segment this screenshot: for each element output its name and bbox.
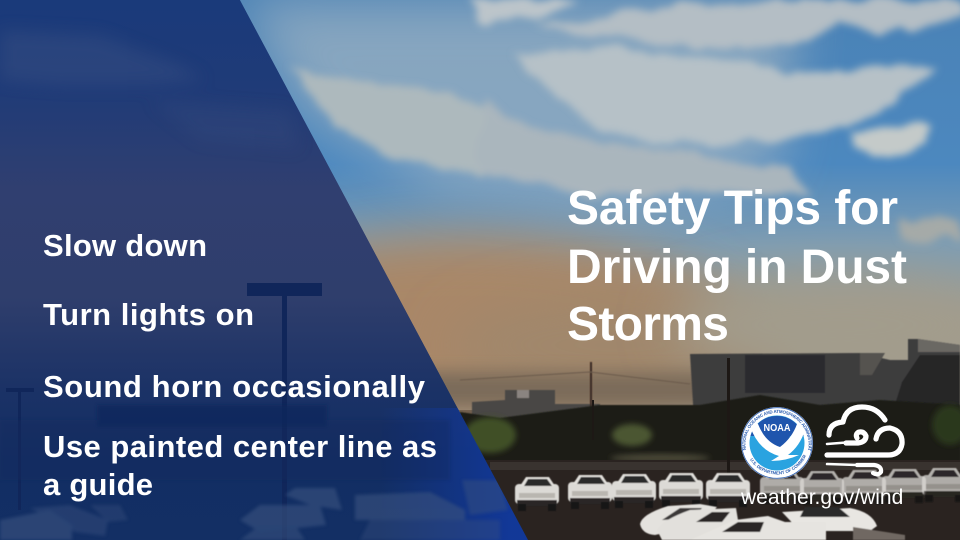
parking lot ground: [460, 460, 960, 540]
faint lamp posts: [6, 283, 322, 510]
haze over sky: [240, 0, 800, 210]
tip: slow down: Slow down: [43, 228, 207, 263]
sky: [0, 0, 960, 410]
panel fill: [0, 0, 528, 540]
icon: NOAA logo: NOAA: [764, 422, 791, 434]
distant buildings: [460, 362, 690, 422]
icon: wind cloud: [827, 407, 902, 474]
tip: sound horn: Sound horn occasionally: [43, 369, 426, 404]
blue diagonal panel: [0, 0, 530, 540]
title: Driving in Dust: [567, 241, 907, 294]
tip: center line: a guide: [43, 467, 153, 502]
icon: NOAA logo: NATIONAL OCEANIC AND ATMOSPHERIC ADMINISTRATION: [742, 410, 812, 452]
front row vehicles: [640, 504, 905, 540]
dust wall: [210, 235, 960, 415]
icon: NOAA logo: [741, 407, 813, 479]
large building: [690, 339, 960, 420]
faint cloud texture in panel: [2, 34, 179, 80]
link text: weather.gov/wind: [740, 486, 903, 509]
tip: center line: [43, 429, 437, 502]
parked trucks: [515, 468, 960, 511]
title: Safety Tips for: [567, 182, 898, 235]
faint dark treeline and buildings: [96, 408, 450, 480]
faint parked cars: [0, 480, 508, 540]
bright blue zone along panel edge: [400, 408, 528, 540]
title: [567, 182, 907, 351]
poles: [592, 358, 730, 488]
trees: [460, 395, 960, 462]
clouds: [290, 0, 960, 240]
tip: center line: Use painted center line as: [43, 429, 437, 464]
tip: turn lights on: Turn lights on: [43, 297, 254, 332]
title: Storms: [567, 298, 729, 351]
icon: NOAA logo: U.S. DEPARTMENT OF COMMERCE: [750, 454, 806, 474]
safety tips list: [43, 228, 437, 502]
